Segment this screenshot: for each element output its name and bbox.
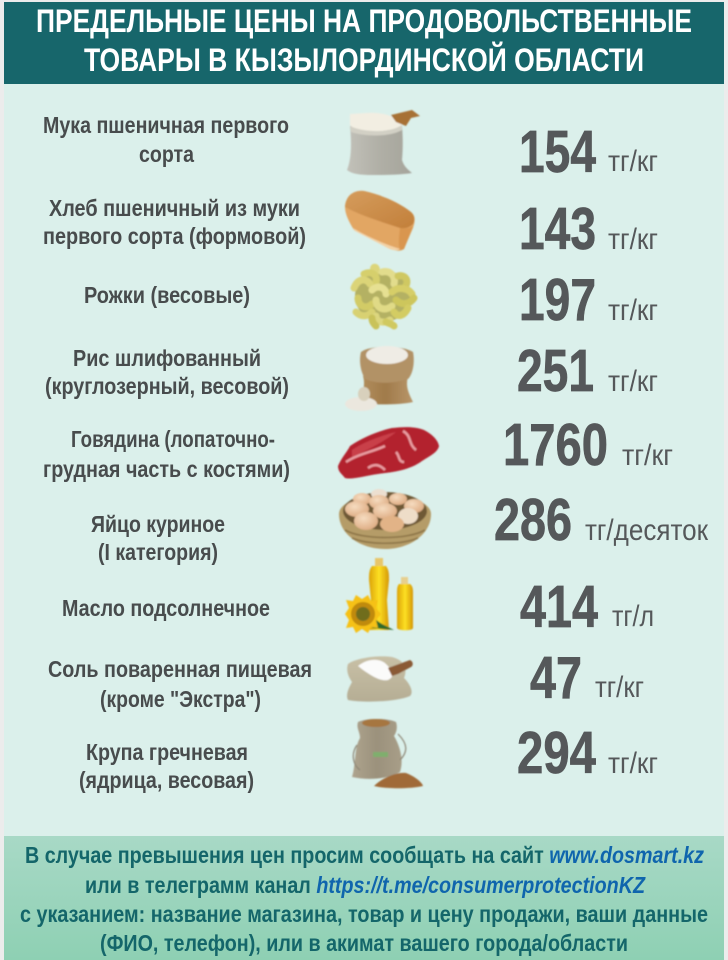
row: flour bbox=[43, 110, 658, 185]
footer: reporting note: (ФИО, телефон), или в акимат вашего города/области bbox=[100, 930, 628, 956]
row: oil bbox=[62, 558, 654, 640]
price: salt: тг/кг bbox=[595, 671, 644, 704]
label: oil: Масло подсолнечное bbox=[62, 595, 270, 621]
icon: flour sack bbox=[347, 110, 420, 175]
price: oil: 414 bbox=[520, 574, 598, 640]
label: rice: (круглозерный, весовой) bbox=[45, 373, 289, 399]
icon: salt sack bbox=[347, 656, 413, 702]
price: buckwheat: 294 bbox=[517, 720, 596, 786]
price: bread: тг/кг bbox=[608, 223, 658, 256]
row: eggs bbox=[91, 487, 709, 565]
icon: beef bbox=[338, 427, 439, 479]
label: buckwheat: Крупа гречневая bbox=[86, 739, 248, 765]
price: pasta: 197 bbox=[519, 267, 596, 333]
price: rice bbox=[517, 338, 658, 404]
price: oil: тг/л bbox=[612, 600, 654, 633]
price: pasta: тг/кг bbox=[608, 294, 658, 327]
label: eggs: Яйцо куриное bbox=[91, 511, 225, 537]
row: pasta bbox=[84, 267, 658, 333]
row: salt bbox=[48, 645, 644, 712]
label: salt bbox=[48, 656, 312, 712]
label: rice bbox=[45, 345, 289, 399]
price: eggs: тг/десяток bbox=[585, 514, 709, 547]
icon: bread loaf bbox=[345, 191, 415, 251]
icon: egg basket bbox=[339, 489, 431, 549]
icon: oil bottles and sunflower bbox=[345, 558, 413, 633]
footer: reporting note: В случае превышения цен просим сообщать на сайт www.dosmart.kz bbox=[25, 842, 704, 868]
price: salt: 47 bbox=[530, 645, 582, 711]
price: buckwheat: тг/кг bbox=[608, 747, 658, 780]
icon: buckwheat sack bbox=[352, 719, 423, 788]
price: eggs: 286 bbox=[494, 487, 572, 553]
price: flour: тг/кг bbox=[608, 145, 658, 178]
label: buckwheat: (ядрица, весовая) bbox=[79, 767, 254, 793]
price: beef: тг/кг bbox=[622, 439, 673, 472]
footer: reporting note: или в телеграмм канал https://t.me/consumerprotectionKZ bbox=[85, 872, 646, 898]
price: beef: 1760 bbox=[503, 412, 608, 478]
footer: reporting note bbox=[4, 836, 724, 960]
label: beef: грудная часть с костями) bbox=[43, 456, 290, 482]
price: flour: 154 bbox=[519, 119, 596, 185]
label: flour: сорта bbox=[139, 141, 194, 167]
label: flour bbox=[43, 112, 289, 167]
panel: content background bbox=[4, 84, 724, 836]
price: buckwheat bbox=[517, 720, 658, 786]
label: bread: Хлеб пшеничный из муки bbox=[49, 195, 300, 221]
icon: pasta bbox=[354, 267, 414, 326]
row: beef bbox=[43, 412, 673, 482]
label: pasta: Рожки (весовые) bbox=[84, 282, 250, 308]
row: buckwheat bbox=[79, 719, 658, 793]
label: buckwheat bbox=[79, 739, 254, 793]
label: rice: Рис шлифованный bbox=[73, 345, 261, 371]
price: salt bbox=[530, 645, 644, 711]
header with title bbox=[4, 2, 724, 84]
price: eggs bbox=[494, 487, 709, 553]
label: beef bbox=[43, 426, 290, 482]
label: bread: первого сорта (формовой) bbox=[43, 223, 306, 249]
label: bread bbox=[43, 195, 306, 249]
row: rice bbox=[45, 338, 658, 411]
label: eggs: (I категория) bbox=[98, 539, 218, 565]
label: flour: Мука пшеничная первого bbox=[43, 112, 289, 138]
label: eggs bbox=[91, 511, 225, 565]
label: salt: Соль поваренная пищевая bbox=[48, 656, 312, 682]
label: beef: Говядина (лопаточно- bbox=[71, 426, 275, 452]
icon: rice sack bbox=[345, 346, 414, 411]
label: salt: (кроме "Экстра") bbox=[100, 686, 261, 712]
price: rice: 251 bbox=[517, 338, 594, 404]
price: bread: 143 bbox=[519, 196, 596, 262]
price: rice: тг/кг bbox=[608, 365, 658, 398]
row: bread bbox=[43, 191, 658, 262]
